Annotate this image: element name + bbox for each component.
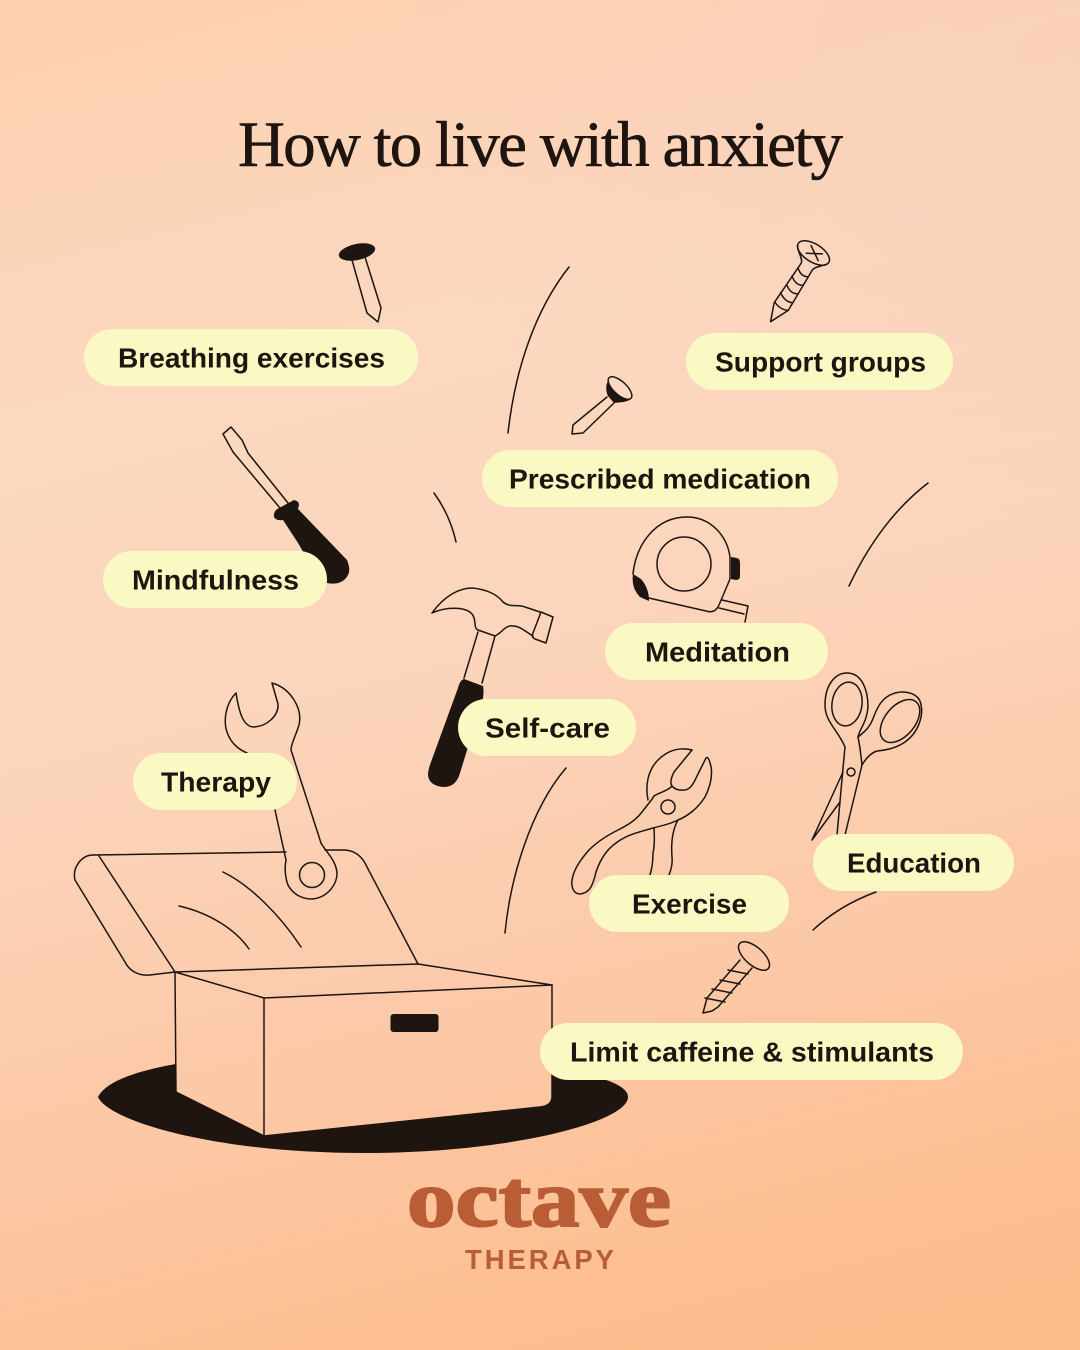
icon: scissors (812, 673, 928, 840)
pill: meditation: Meditation (645, 636, 790, 668)
icon: screw top right (755, 236, 834, 331)
pill: mindfulness: Mindfulness (132, 564, 299, 596)
icon: screwdriver (223, 427, 349, 584)
pill: exercise: Exercise (632, 888, 747, 920)
pill: support groups (686, 333, 953, 390)
icon: tape measure (633, 517, 748, 622)
pill: support groups: Support groups (715, 346, 926, 378)
pill: therapy (133, 753, 297, 810)
icon: small nail (572, 373, 635, 434)
pill: limit caffeine and stimulants (540, 1023, 963, 1080)
icon: pliers (572, 749, 712, 894)
pill: breathing exercises: Breathing exercises (118, 342, 385, 374)
pill: breathing exercises (84, 329, 418, 386)
logo: octave therapy (407, 1156, 671, 1275)
toolbox shadow (98, 1064, 628, 1153)
pill: therapy: Therapy (161, 766, 271, 798)
icon: screw bottom (703, 937, 774, 1013)
logo: octave therapy: octave (407, 1156, 671, 1244)
pill: meditation (605, 623, 828, 680)
icon: wrench (225, 683, 337, 899)
pill: education: Education (847, 848, 981, 878)
toolbox (74, 850, 552, 1136)
pill: limit caffeine and stimulants: Limit caffeine & stimulants (570, 1036, 934, 1068)
logo: octave therapy: THERAPY (465, 1244, 614, 1275)
motion lines (434, 267, 928, 933)
pill: education (813, 834, 1014, 891)
pill: self-care (458, 699, 636, 756)
pill: prescribed medication: Prescribed medication (509, 464, 811, 494)
icon: hammer (428, 588, 553, 787)
icon: nail (337, 240, 381, 322)
pill: exercise (589, 875, 789, 932)
pill: prescribed medication (482, 450, 838, 507)
pill: mindfulness (103, 551, 327, 608)
pill: self-care: Self-care (485, 712, 610, 744)
title: How to live with anxiety (238, 109, 844, 181)
